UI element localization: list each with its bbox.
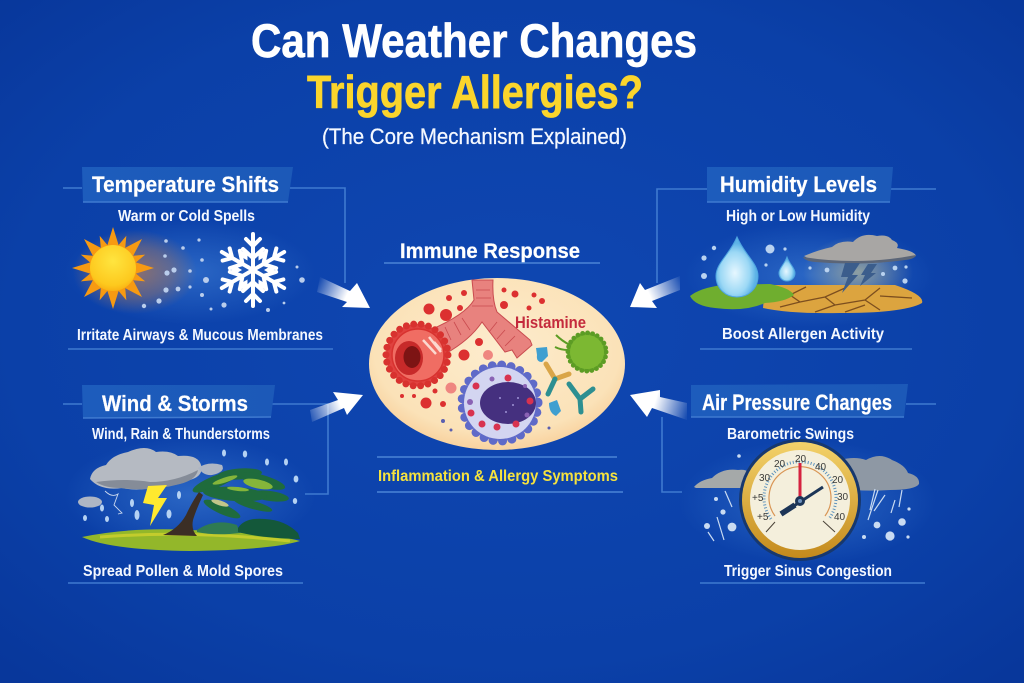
allergen fragments	[536, 347, 561, 416]
title: Trigger Allergies?	[307, 66, 643, 118]
icon: barometer gauge with clouds and rain: +5	[757, 512, 769, 523]
label: histamine: Histamine	[515, 314, 586, 332]
caption: boost allergen activity: Boost Allergen Activity	[722, 326, 884, 343]
subheading: barometric swings: Barometric Swings	[727, 426, 854, 443]
icon: barometer gauge with clouds and rain: +5	[752, 493, 764, 504]
icon: barometer gauge with clouds and rain: 20	[774, 459, 786, 470]
immune cell	[462, 365, 538, 441]
icon: barometer gauge with clouds and rain: 30	[759, 473, 771, 484]
arrow: humidity to immune response	[630, 276, 680, 308]
arrow: wind and storms to immune response	[310, 392, 363, 422]
title: (The Core Mechanism Explained)	[322, 124, 627, 149]
arrow: air pressure to immune response	[630, 390, 687, 420]
heading banner: temperature shifts	[82, 167, 293, 202]
caption: trigger sinus congestion: Trigger Sinus Congestion	[724, 563, 892, 580]
heading banner: air pressure changes	[691, 384, 908, 417]
icon: barometer gauge with clouds and rain: 40	[815, 462, 827, 473]
caption: irritate airways: Irritate Airways & Mucous Membranes	[77, 327, 323, 344]
arrow: temperature to immune response	[317, 277, 370, 308]
icon: barometer gauge with clouds and rain: 40	[834, 512, 846, 523]
heading banner: humidity levels	[707, 167, 893, 202]
subheading: high or low humidity: High or Low Humidity	[726, 208, 870, 225]
heading banner: air pressure changes: Air Pressure Changes	[702, 390, 892, 415]
icon: barometer gauge with clouds and rain: 30	[837, 492, 849, 503]
heading banner: humidity levels: Humidity Levels	[720, 172, 877, 197]
icon: barometer gauge with clouds and rain: 20	[832, 475, 844, 486]
oval illustration: airway, histamine, immune cell	[369, 278, 625, 450]
title: Can Weather Changes	[251, 14, 697, 67]
antibodies	[546, 364, 593, 412]
caption: spread pollen and mold spores: Spread Pollen & Mold Spores	[83, 563, 283, 580]
allergen: green spore	[555, 333, 606, 371]
icon: storm cloud, lightning and bent tree	[65, 437, 315, 553]
heading banner: temperature shifts: Temperature Shifts	[92, 172, 279, 197]
panel: air pressure changes	[662, 384, 936, 583]
heading: immune response: Immune Response	[400, 240, 580, 263]
heading banner: wind and storms: Wind & Storms	[102, 391, 248, 416]
panel: wind and storms	[63, 385, 328, 583]
panel: immune response	[369, 240, 625, 492]
caption: inflammation and allergy symptoms: Inflammation & Allergy Symptoms	[378, 468, 618, 485]
heading banner: wind and storms	[82, 385, 275, 418]
icon: water drops, cracked ground and storm cloud	[685, 223, 935, 327]
panel: temperature shifts	[63, 167, 345, 349]
icon: barometer gauge with clouds and rain	[680, 439, 936, 564]
subheading: wind rain and thunderstorms: Wind, Rain & Thunderstorms	[92, 426, 270, 443]
icon: barometer gauge with clouds and rain: 20	[795, 454, 807, 465]
title	[251, 14, 697, 149]
panel: humidity levels	[657, 167, 936, 349]
subheading: warm or cold spells: Warm or Cold Spells	[118, 208, 255, 225]
icon: sun and snowflake	[65, 220, 315, 324]
